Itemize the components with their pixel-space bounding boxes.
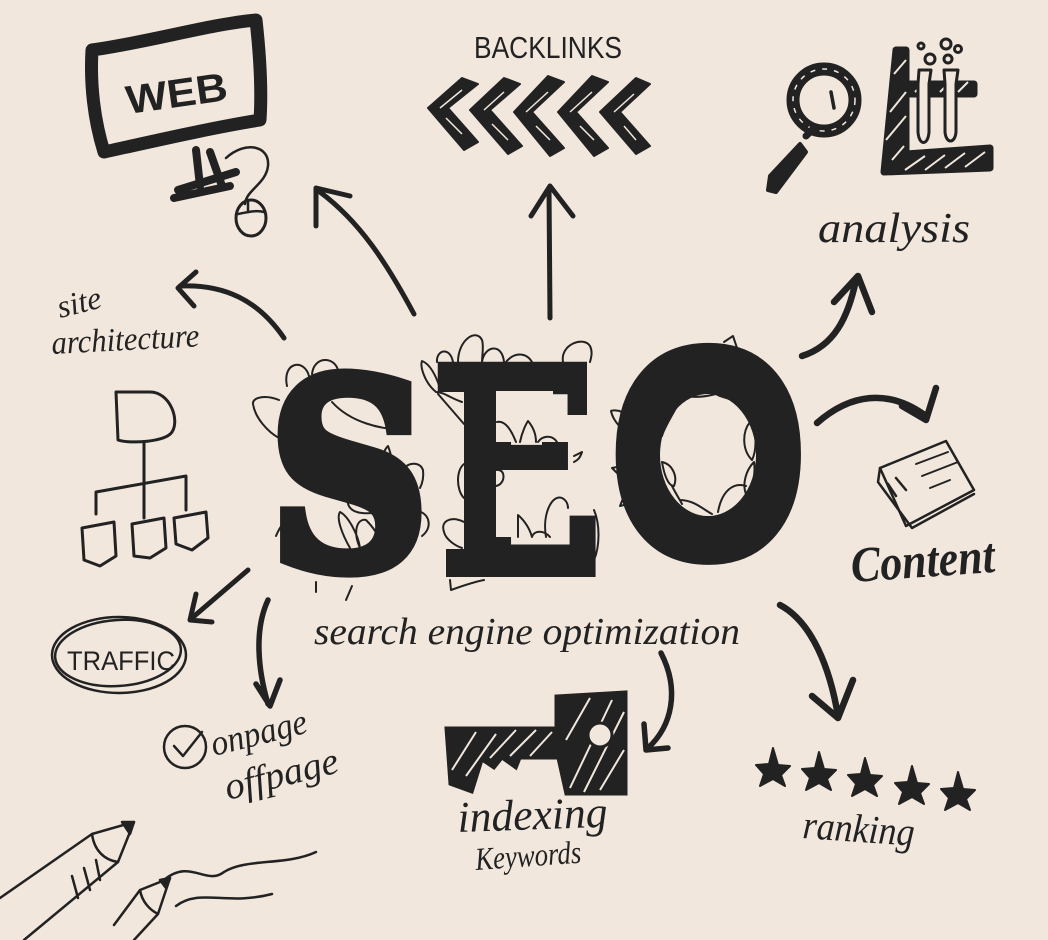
label: onpage offpage with check — [164, 701, 343, 809]
arrow: to traffic — [190, 570, 248, 622]
icon: web monitor: WEB — [123, 65, 230, 123]
icon: magnifier and lab tubes — [768, 39, 990, 192]
icon: traffic badge — [52, 616, 186, 693]
icon: content document — [878, 441, 974, 528]
label and icon: backlinks chevrons: BACKLINKS — [474, 30, 622, 65]
arrow: to site architecture — [178, 272, 284, 338]
label: onpage offpage with check: offpage — [220, 740, 343, 809]
icon: traffic badge: TRAFFIC — [67, 646, 175, 676]
arrow: to analysis — [802, 276, 872, 356]
icon: web monitor — [92, 20, 268, 236]
title: SEO: O — [612, 296, 805, 619]
label: indexing keywords: Keywords — [473, 834, 582, 877]
label: ranking: ranking — [801, 802, 916, 855]
label: site architecture: site — [53, 279, 105, 325]
arrow: to onpage — [256, 600, 280, 706]
arrow: to backlinks — [531, 186, 573, 318]
arrow: to ranking — [780, 605, 853, 718]
label: onpage offpage with check: onpage — [206, 701, 311, 764]
icon: key — [446, 692, 626, 794]
E letter counters and scribbles — [421, 335, 601, 590]
O inner scalloped counter — [648, 382, 768, 528]
title: SEO — [269, 296, 805, 635]
subtitle: search engine optimization — [314, 611, 740, 653]
icon: pencils — [0, 822, 316, 940]
icon: five stars — [756, 748, 975, 810]
arrow: to content — [817, 388, 936, 423]
arrow: to keywords — [644, 653, 672, 750]
title: SEO: E — [433, 310, 601, 635]
label: site architecture — [51, 279, 200, 362]
arrow: to web — [316, 188, 414, 314]
title: SEO: S — [269, 324, 429, 628]
label: site architecture: architecture — [51, 318, 200, 362]
label and icon: backlinks chevrons — [428, 30, 650, 156]
label: content: Content — [849, 527, 998, 593]
doodle scribbles behind SEO — [253, 336, 737, 600]
icon: site tree — [82, 392, 208, 566]
label: indexing keywords — [457, 788, 608, 877]
label: indexing keywords: indexing — [457, 788, 608, 842]
label: analysis: analysis — [818, 206, 970, 252]
